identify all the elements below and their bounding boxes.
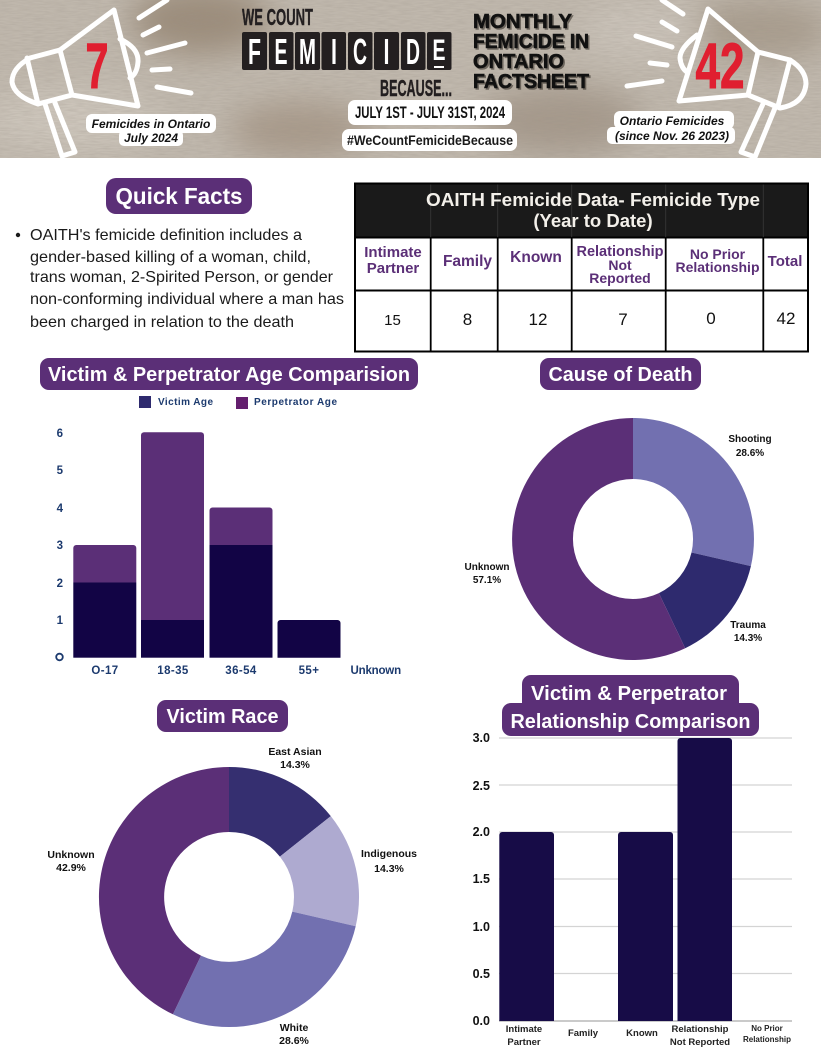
hashtag pill: #WeCountFemicideBecause	[347, 133, 513, 148]
date pill: JULY 1ST - JULY 31ST, 2024	[355, 103, 505, 122]
table column headers: Partner	[367, 260, 419, 277]
stacked bars: perpetrator age	[73, 432, 272, 620]
donut: cause of death	[512, 418, 754, 660]
caption: Ontario femicides since Nov 2023	[607, 111, 735, 144]
table column headers: Not	[608, 257, 632, 273]
table values: 42	[777, 309, 795, 328]
y axis labels: 4	[57, 503, 64, 515]
donut labels: East Asian	[268, 746, 322, 758]
heading: monthly factsheet: FEMICIDE IN	[474, 32, 590, 54]
donut labels: 28.6%	[279, 1035, 310, 1047]
heading: monthly factsheet: ONTARIO	[474, 52, 566, 74]
y axis labels: 5	[57, 465, 64, 477]
x axis labels: Not Reported	[670, 1037, 730, 1048]
y axis labels: 3.0	[473, 731, 490, 745]
x axis labels: Partner	[507, 1037, 541, 1048]
table values: 12	[529, 310, 547, 329]
table title	[426, 189, 760, 231]
date pill	[348, 100, 512, 125]
heading: relationship comparison: Relationship Comparison	[510, 710, 750, 733]
text block: femicide definition: non-conforming individual where a man has	[30, 291, 344, 308]
heading: monthly factsheet: MONTHLY	[473, 11, 573, 33]
text block: femicide definition	[16, 227, 344, 331]
table values	[384, 309, 795, 329]
x axis labels: 55+	[299, 665, 319, 677]
logo: We Count Femicide Because	[242, 4, 452, 101]
y axis labels: 1.5	[473, 872, 490, 886]
y axis labels: 6	[57, 428, 63, 440]
number: July femicides: 7	[86, 30, 108, 102]
logo: We Count Femicide Because: BECAUSE...	[380, 75, 452, 101]
donut labels: 28.6%	[736, 448, 764, 459]
text block: femicide definition: OAITH's femicide definition includes a	[30, 227, 302, 244]
number: year to date femicides: 42	[696, 30, 744, 102]
table column headers: No Prior	[690, 246, 746, 262]
table column headers: Total	[768, 253, 802, 270]
caption: Ontario femicides since Nov 2023: (since Nov. 26 2023)	[615, 129, 729, 143]
heading: victim race	[157, 700, 288, 732]
panel: quick facts	[16, 178, 344, 331]
x axis labels: O-17	[91, 665, 119, 677]
stacked bars: victim age	[73, 545, 341, 658]
heading: monthly factsheet: FACTSHEET	[473, 71, 589, 93]
donut labels: 57.1%	[473, 575, 501, 586]
x axis labels	[506, 1024, 791, 1048]
heading: monthly factsheet	[473, 11, 590, 94]
heading: cause of death: Cause of Death	[548, 363, 692, 386]
logo: We Count Femicide Because: M	[299, 31, 316, 72]
donut labels: Shooting	[728, 434, 772, 445]
donut labels: White	[280, 1022, 308, 1034]
table title: (Year to Date)	[533, 210, 653, 231]
panel: victim race chart	[47, 700, 417, 1047]
panel: cause of death chart	[464, 358, 772, 660]
y axis labels: 1.0	[473, 920, 490, 934]
y axis labels: 1	[57, 615, 64, 627]
x axis labels: 36-54	[225, 665, 257, 677]
table column headers	[364, 244, 802, 286]
legend: Perpetrator Age	[254, 397, 337, 408]
donut labels: 14.3%	[280, 759, 311, 771]
table: femicide type year to date	[355, 184, 808, 352]
table title: OAITH Femicide Data- Femicide Type	[426, 189, 760, 210]
heading: monthly factsheet: FACTSHEET	[474, 72, 590, 94]
x axis labels: Family	[568, 1028, 599, 1039]
heading: relationship comparison: Victim & Perpetrator	[531, 682, 727, 705]
heading: quick facts: Quick Facts	[116, 183, 242, 209]
table values: 0	[706, 309, 716, 328]
caption: femicides in Ontario: July 2024	[124, 131, 178, 145]
legend: Victim Age	[158, 397, 213, 408]
heading: victim race: Victim Race	[166, 705, 278, 728]
donut labels	[47, 746, 417, 1047]
text block: femicide definition: trans woman, 2-Spirited Person, or gender	[30, 269, 334, 286]
heading: monthly factsheet: FEMICIDE IN	[473, 31, 589, 53]
x axis labels: Relationship	[671, 1024, 729, 1035]
panel: age comparison chart	[40, 358, 418, 677]
heading: relationship comparison	[502, 675, 759, 736]
logo: We Count Femicide Because: I	[384, 31, 390, 72]
donut labels: Trauma	[730, 620, 766, 631]
panel: relationship comparison chart	[473, 675, 792, 1048]
donut labels: 14.3%	[734, 633, 762, 644]
x axis labels	[91, 665, 402, 677]
x axis labels: Known	[626, 1028, 658, 1039]
donut labels: Indigenous	[361, 848, 417, 860]
logo: We Count Femicide Because: I	[331, 31, 337, 72]
bars: relationship counts	[499, 738, 732, 1021]
logo: We Count Femicide Because: WE COUNT	[242, 4, 313, 30]
icon: right megaphone	[627, 0, 806, 157]
donut: victim race	[99, 767, 359, 1027]
y axis labels	[473, 731, 490, 1028]
x axis labels: Intimate	[506, 1024, 542, 1035]
y axis labels: 3	[57, 540, 63, 552]
table values: 15	[384, 312, 401, 329]
legend	[139, 396, 337, 409]
logo: We Count Femicide Because: F	[248, 31, 261, 72]
y axis labels	[56, 428, 64, 660]
table column headers: Relationship	[675, 259, 760, 275]
logo: We Count Femicide Because: C	[353, 31, 367, 72]
y axis labels: 0.0	[473, 1014, 490, 1028]
heading: cause of death	[540, 358, 701, 390]
logo: We Count Femicide Because: E	[432, 34, 446, 67]
heading: quick facts	[106, 178, 252, 214]
x axis labels: 18-35	[157, 665, 189, 677]
donut labels: Unknown	[47, 849, 95, 861]
text block: femicide definition: been charged in relation to the death	[30, 314, 294, 331]
table values: 7	[618, 310, 628, 329]
y axis labels: 2.5	[473, 779, 490, 793]
table values: 8	[463, 310, 472, 329]
table column headers: Known	[510, 249, 562, 266]
y axis labels: 2	[57, 578, 63, 590]
logo: We Count Femicide Because: E	[274, 31, 288, 72]
caption: femicides in Ontario	[86, 114, 216, 146]
heading: age comparison: Victim & Perpetrator Age Comparision	[48, 363, 410, 386]
table column headers: Relationship	[576, 244, 664, 260]
table column headers: Reported	[589, 270, 651, 286]
y axis labels: 0.5	[473, 967, 490, 981]
donut labels: Unknown	[464, 562, 510, 573]
donut labels: 14.3%	[374, 863, 405, 875]
x axis labels: No Prior	[751, 1024, 783, 1033]
y axis labels: 2.0	[473, 825, 490, 839]
donut labels: 42.9%	[56, 862, 87, 874]
heading: monthly factsheet: ONTARIO	[473, 51, 564, 73]
hashtag pill	[342, 129, 517, 151]
table column headers: Family	[443, 253, 492, 270]
table column headers: Intimate	[364, 244, 422, 261]
panel: header banner	[0, 0, 821, 158]
caption: femicides in Ontario: Femicides in Ontario	[92, 117, 210, 131]
text block: femicide definition: gender-based killing of a woman, child,	[30, 249, 311, 266]
x axis labels: Unknown	[350, 665, 402, 677]
logo: We Count Femicide Because: D	[406, 31, 420, 72]
caption: Ontario femicides since Nov 2023: Ontario Femicides	[620, 114, 725, 128]
donut labels	[464, 434, 772, 644]
heading: monthly factsheet: MONTHLY	[474, 12, 574, 34]
icon: left megaphone	[12, 0, 191, 156]
x axis labels: Relationship	[743, 1035, 791, 1044]
